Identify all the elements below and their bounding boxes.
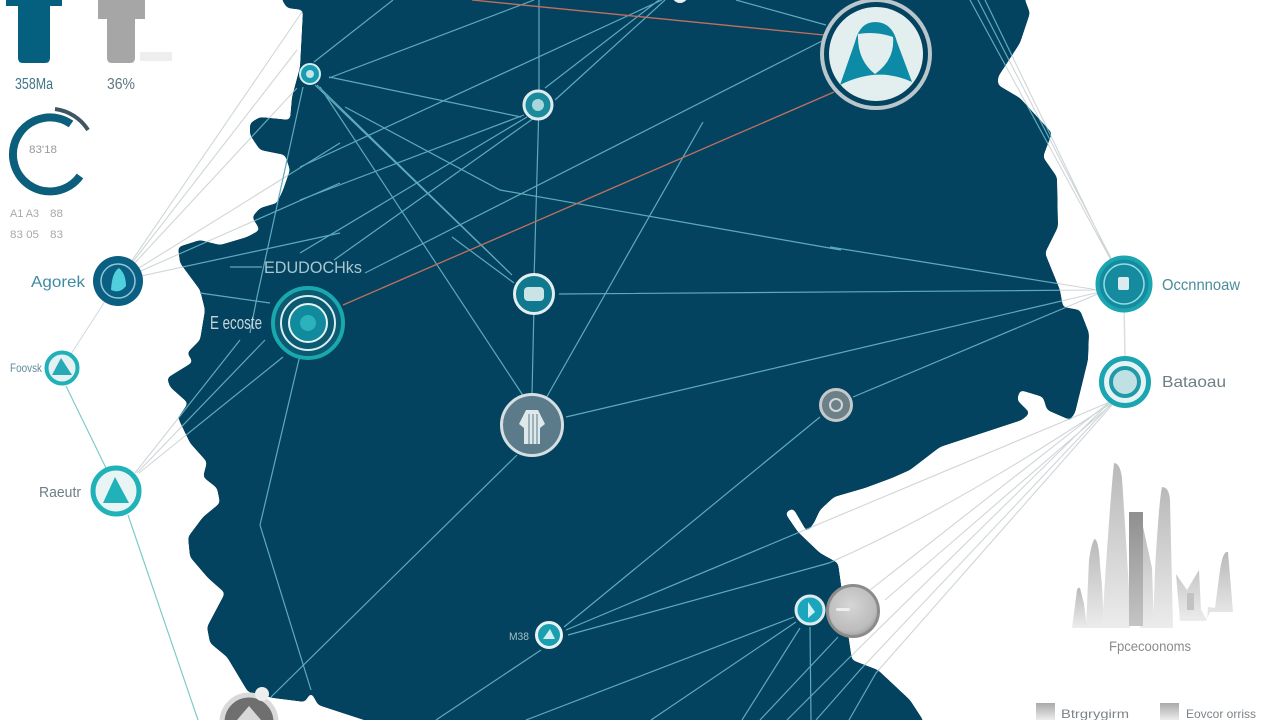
node: left dark with label <box>31 256 143 306</box>
red connection lines <box>343 0 834 305</box>
hub heading: EDUDOCHks <box>264 258 362 277</box>
node: lower right grey knob <box>828 586 878 636</box>
label: Agorek <box>31 274 86 291</box>
node: top person <box>822 0 930 108</box>
network connection lines over map <box>178 0 1072 720</box>
node: left small with label <box>10 352 78 384</box>
chart caption: Fpcecoonoms <box>1109 638 1191 654</box>
donut legend <box>10 208 63 241</box>
grey figure value: 36% <box>107 76 135 93</box>
donut value: 83'18 <box>29 144 57 156</box>
legend item one <box>1036 703 1129 720</box>
teal figure value: 358Ma <box>15 76 53 93</box>
hub label: E ecoste <box>210 313 262 333</box>
node: top edge white <box>672 0 688 3</box>
node: bottom grey <box>222 687 276 720</box>
label: M38 <box>509 631 529 643</box>
node: concentric main hub with labels <box>210 258 362 358</box>
legend item two <box>1160 703 1256 720</box>
node: lower right teal <box>796 596 824 624</box>
node: right upper with label <box>1098 258 1240 310</box>
node: right grey small <box>820 390 852 420</box>
teal lines on white background <box>62 281 1125 720</box>
label: Foovsk <box>10 361 43 375</box>
donut legend: 88 <box>50 208 63 220</box>
area chart: grey spikes <box>1072 463 1233 628</box>
node: upper centre <box>524 91 552 119</box>
node: centre <box>514 274 554 314</box>
network connection lines inside map <box>200 0 841 720</box>
donut chart <box>13 109 88 191</box>
node: upper left small <box>300 64 320 84</box>
figure icon: grey bar with label <box>98 0 145 93</box>
node: lower left with label <box>39 468 139 514</box>
faint smudge beside grey figure <box>140 52 172 61</box>
donut legend: 83 05 <box>10 229 39 241</box>
donut legend: A1 A3 <box>10 208 39 220</box>
label: Raeutr <box>39 484 81 501</box>
map landmass <box>167 0 1089 720</box>
node: right lower with label <box>1102 358 1226 406</box>
donut legend: 83 <box>50 229 63 241</box>
label: Occnnnoaw <box>1162 277 1240 294</box>
node: centre large grey <box>502 394 562 456</box>
lines on white background <box>118 0 1112 720</box>
node: bottom centre with label <box>509 622 562 648</box>
label: Bataoau <box>1162 374 1226 391</box>
chart bars <box>1129 512 1143 626</box>
figure icon: teal bar with label <box>6 0 62 93</box>
